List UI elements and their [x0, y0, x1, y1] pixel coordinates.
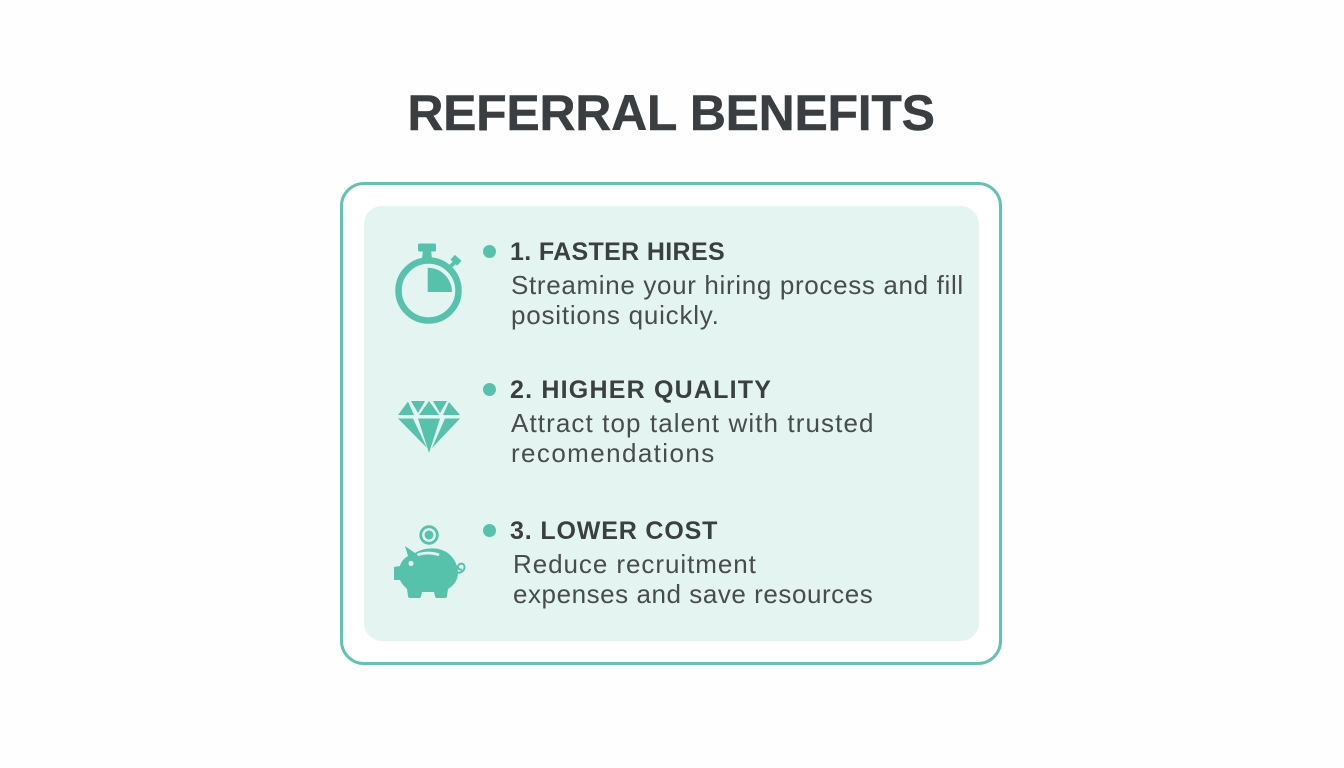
item 2: description: recomendations — [511, 438, 716, 468]
item 1: description: positions quickly. — [511, 300, 720, 330]
panel: inner background — [364, 206, 979, 641]
item 3: bullet — [483, 524, 496, 537]
item 2: heading: 2. HIGHER QUALITY — [510, 376, 772, 404]
icon: piggy bank — [394, 525, 466, 598]
item 3: heading: 3. LOWER COST — [510, 517, 718, 545]
item 1: description — [511, 270, 964, 330]
title: REFERRAL BENEFITS — [407, 85, 935, 141]
icon: diamond — [398, 401, 460, 453]
item 3: description: expenses and save resources — [513, 579, 873, 609]
icon: stopwatch — [395, 244, 462, 324]
panel: outer frame — [340, 182, 1002, 665]
item 1: description: Streamine your hiring process and fill — [511, 270, 964, 300]
item 2: description — [511, 408, 875, 468]
item 2: bullet — [483, 383, 496, 396]
item 3: description — [513, 549, 873, 609]
item 1: heading: 1. FASTER HIRES — [510, 238, 725, 266]
item 1: bullet — [483, 245, 496, 258]
item 3: description: Reduce recruitment — [513, 549, 757, 579]
item 2: description: Attract top talent with trusted — [511, 408, 875, 438]
